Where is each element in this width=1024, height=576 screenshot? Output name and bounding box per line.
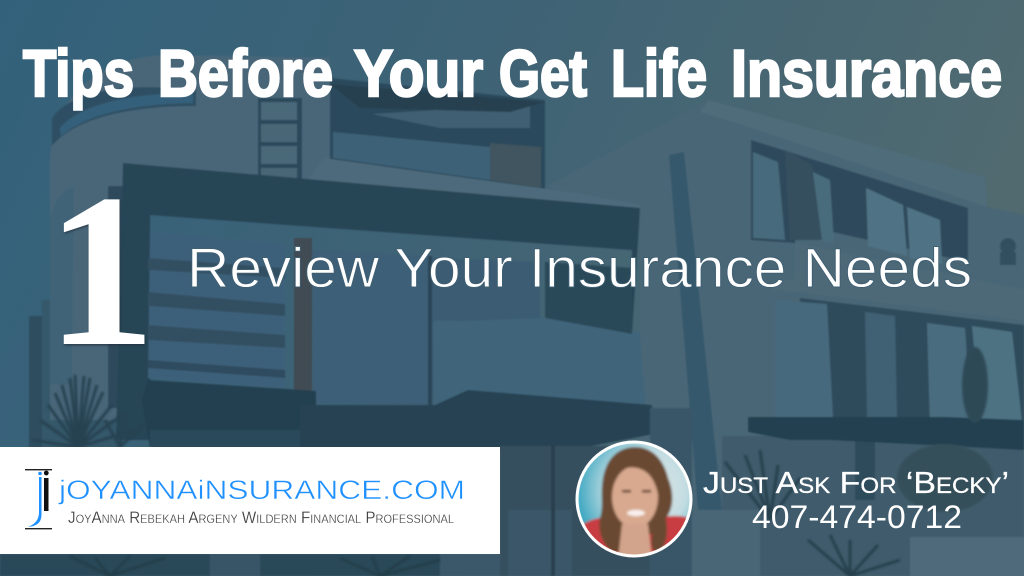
central windows <box>312 250 646 408</box>
logo tagline: JoyAnna Rebekah Argeny Wildern Financial Professional <box>68 509 454 527</box>
right shrub <box>897 444 993 512</box>
fringe <box>628 464 659 492</box>
lower central balcony <box>300 390 654 452</box>
upper right windows <box>751 140 968 264</box>
eyes <box>622 490 631 492</box>
tower slit window <box>258 98 302 183</box>
shrubs under logo <box>70 556 440 576</box>
smile <box>627 510 645 516</box>
central dark frame <box>116 163 640 440</box>
contact: just ask for Becky: Just Ask For ‘Becky’ <box>703 465 1009 500</box>
left fence <box>0 300 120 450</box>
title <box>23 36 1002 110</box>
right building mass <box>545 100 1024 576</box>
jacket <box>584 514 687 552</box>
tip number 1: 1 <box>46 150 156 392</box>
title: Get <box>499 36 587 110</box>
portrait ring <box>576 440 692 558</box>
portrait photo <box>577 442 691 560</box>
bottom right terrace <box>700 436 1024 576</box>
upper balcony <box>304 78 640 210</box>
lower right slab <box>748 417 1024 450</box>
foliage: shrubs and palms <box>32 347 993 576</box>
right palm <box>725 450 900 576</box>
face <box>612 466 658 528</box>
contact: phone number: 407-474-0712 <box>752 499 962 535</box>
title: Life <box>611 36 707 110</box>
portrait of Becky <box>576 440 692 560</box>
title: Tips <box>23 36 134 110</box>
title: Your <box>354 36 483 110</box>
brick pillar <box>294 238 312 446</box>
cylindrical tower <box>50 55 330 420</box>
palm left <box>32 375 143 447</box>
right building glass column <box>669 152 722 510</box>
rooftop plant <box>1000 238 1016 265</box>
wide window with blinds <box>148 232 285 388</box>
title: Before <box>158 36 333 110</box>
lower left balcony <box>142 380 316 448</box>
logo wordmark: jOYANNAiNSURANCE.COM <box>58 475 465 505</box>
panel: logo <box>0 447 500 554</box>
lower wall below balconies <box>0 408 692 576</box>
logo background <box>0 447 500 554</box>
tip heading: Review Your Insurance Needs <box>187 236 972 299</box>
lower right windows <box>775 298 1024 450</box>
hair mass <box>599 447 672 552</box>
icon: ji monogram <box>25 469 52 529</box>
middle right slab <box>772 243 1024 320</box>
chest <box>618 524 652 560</box>
